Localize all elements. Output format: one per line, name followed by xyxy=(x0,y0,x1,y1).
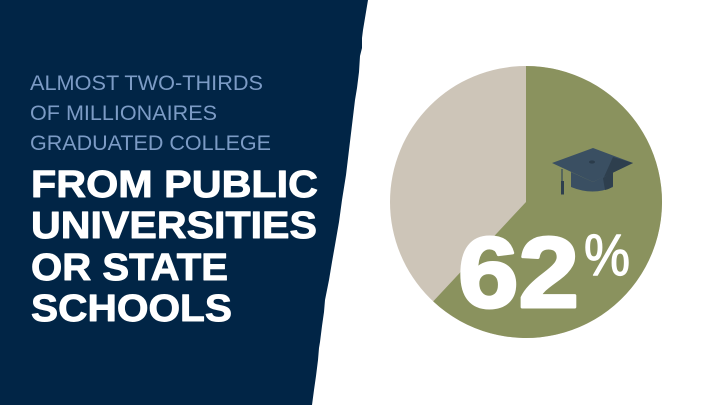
pie chart xyxy=(390,66,662,338)
intro text xyxy=(30,72,271,155)
icon: graduation cap xyxy=(552,148,633,194)
heading: OR STATE xyxy=(31,247,228,289)
heading: SCHOOLS xyxy=(31,288,232,330)
intro text: GRADUATED COLLEGE xyxy=(30,132,271,155)
intro text: OF MILLIONAIRES xyxy=(30,102,217,125)
stat: 62%: % xyxy=(584,223,630,288)
stat: 62% xyxy=(458,217,630,329)
intro text: ALMOST TWO-THIRDS xyxy=(30,72,263,95)
heading: UNIVERSITIES xyxy=(31,205,317,247)
heading: FROM PUBLIC xyxy=(31,164,318,206)
stat: 62%: 62 xyxy=(458,217,579,329)
panel: navy slanted background with rough edge xyxy=(0,0,368,405)
heading xyxy=(31,164,318,330)
